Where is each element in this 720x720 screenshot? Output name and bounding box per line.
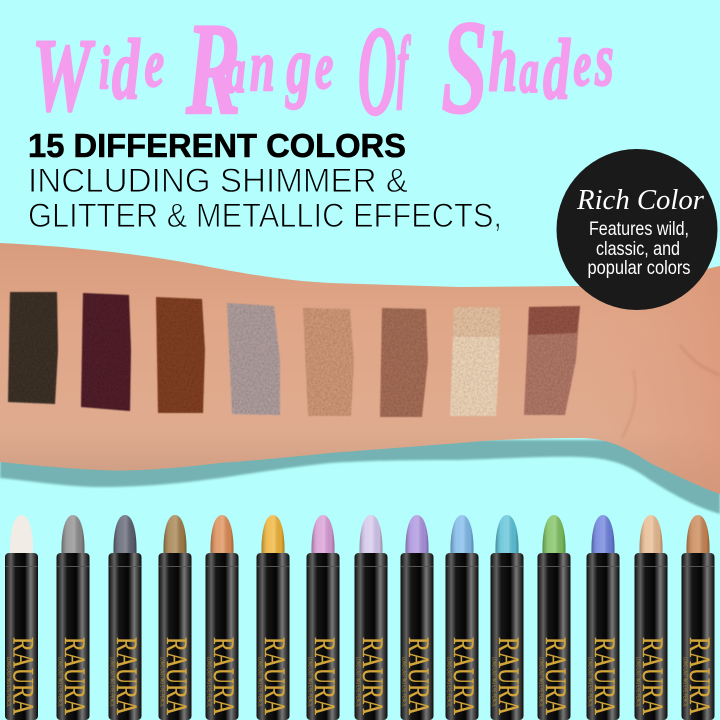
title: d bbox=[112, 22, 140, 117]
pencil 6: gold bbox=[256, 515, 291, 720]
swatch 6: copper brown bbox=[380, 308, 428, 417]
pencil 13: royal blue bbox=[586, 515, 621, 720]
pencil 10: sky blue bbox=[446, 515, 480, 720]
swatch 7: champagne bbox=[450, 307, 500, 416]
title: e bbox=[574, 29, 591, 99]
subheading line: glitter and metallic: GLITTER & METALLIC EFFECTS, bbox=[28, 197, 502, 235]
title: d bbox=[543, 22, 571, 117]
swatch 3: chocolate bbox=[156, 297, 205, 413]
badge line 3: popular colors bbox=[588, 258, 690, 279]
title: h bbox=[489, 17, 518, 109]
pencil 5: copper bbox=[206, 515, 240, 720]
swatch 7 top band bbox=[453, 307, 500, 337]
title: e bbox=[315, 29, 333, 102]
pencil 14: peach bbox=[634, 515, 669, 720]
swatch 8 top band bbox=[528, 306, 580, 335]
badge title: Rich Color bbox=[576, 184, 705, 216]
title: a bbox=[226, 36, 246, 106]
forearm and wrist bbox=[0, 243, 720, 494]
title bbox=[32, 0, 614, 143]
swatch 5: rose bronze bbox=[303, 308, 354, 416]
arm shadow bbox=[0, 440, 720, 514]
badge line 2: classic, and bbox=[596, 239, 680, 260]
title: e bbox=[145, 26, 164, 101]
pencil 11: teal bbox=[490, 515, 525, 720]
title: n bbox=[250, 26, 275, 106]
title: s bbox=[594, 18, 614, 102]
pencil 1: pearl white bbox=[5, 515, 40, 720]
pencil 8: lilac bbox=[354, 515, 389, 720]
swatch 2: plum bbox=[81, 293, 131, 411]
pencil 15: terracotta bbox=[682, 515, 716, 720]
title: a bbox=[520, 38, 539, 106]
title: O bbox=[358, 2, 397, 143]
title: W bbox=[32, 17, 95, 133]
pencil 12: green bbox=[538, 515, 572, 720]
swatch 8: rose copper bbox=[524, 306, 580, 415]
pencil 9: purple bbox=[400, 515, 435, 720]
swatch 4: mauve grey bbox=[227, 303, 280, 415]
swatches on arm bbox=[8, 292, 580, 417]
title: i bbox=[99, 34, 110, 101]
badge: rich color bbox=[556, 149, 718, 310]
title: g bbox=[285, 22, 311, 110]
pencil 4: bronze bbox=[158, 515, 193, 720]
pencil row bbox=[5, 515, 716, 720]
pencil 3: gunmetal bbox=[108, 515, 143, 720]
subheading line: shimmer: INCLUDING SHIMMER & bbox=[28, 162, 408, 200]
heading: 15 different colors: 15 DIFFERENT COLORS bbox=[28, 127, 406, 164]
pencil 2: silver bbox=[56, 515, 91, 720]
swatch 1: black brown bbox=[8, 292, 58, 404]
badge line 1: Features wild, bbox=[589, 219, 689, 240]
title: f bbox=[397, 22, 411, 110]
pencil 7: pink bbox=[306, 515, 341, 720]
